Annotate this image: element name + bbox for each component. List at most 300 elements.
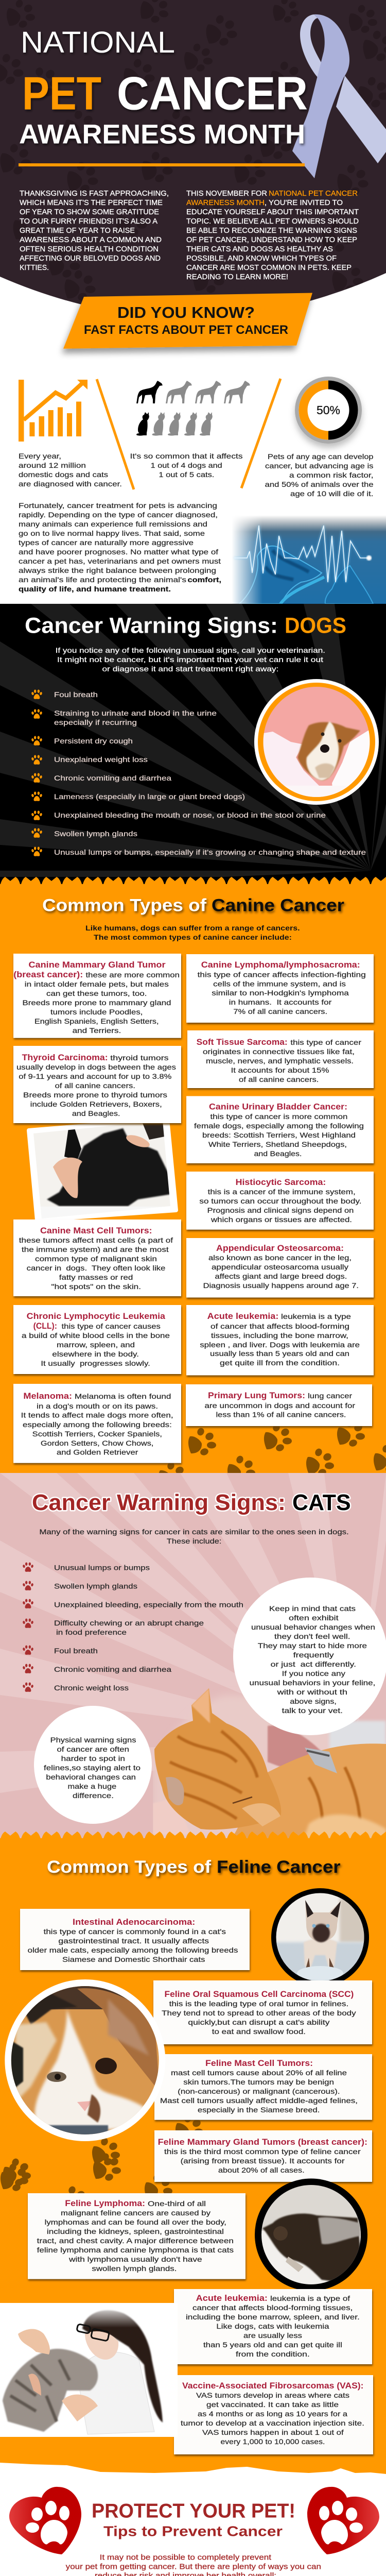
text block: feline mast details: (non-cancerous) or malignant (cancerous). — [178, 2087, 340, 2095]
card: vaccine associated fibrosarcomas — [174, 2375, 373, 2454]
heading: common types of feline cancer: Feline Cancer — [217, 1857, 341, 1877]
text block: mast cell details: these tumors affect mast cells (a part of — [19, 1236, 173, 1244]
text block: feline lymphoma details: One-third of all — [148, 2199, 206, 2208]
card: oral squamous cell carcinoma — [153, 1980, 372, 2044]
callout: behavior changes bubble: with or without th — [276, 1688, 347, 1696]
callout: physical signs bubble: felines,so staying alert to — [44, 1764, 141, 1772]
callout: behavior changes bubble: they don't feel well. — [274, 1632, 350, 1640]
text block: treatment paragraph: cancer a pet has, veterinarians and pet owners must — [19, 557, 221, 565]
text block: sarcoma details: It accounts for about 15% — [231, 1066, 329, 1074]
text block: feline lymphoma details: including the kidneys, spleen, gastrointestinal — [47, 2227, 224, 2235]
callout: behavior changes bubble: unusual behaviors in your feline, — [249, 1679, 375, 1687]
text block: intro right column: OF PET CANCER, UNDERSTAND HOW TO KEEP — [186, 235, 357, 244]
card: feline mammary gland tumors — [154, 2130, 372, 2182]
list: cat warning signs: in food preference — [56, 1628, 127, 1636]
text block: fact 3: a common risk factor, — [289, 471, 374, 479]
text block: feline lymphoma details: swollen lymph glands. — [92, 2264, 177, 2273]
text block: sarcoma details: this type of cancer — [290, 1038, 361, 1046]
text block: fact 3: age of 10 will die of it. — [290, 489, 374, 498]
title: PET — [22, 68, 101, 120]
callout: behavior changes bubble — [233, 1578, 386, 1735]
text block: osteosarcoma details — [203, 1253, 359, 1290]
callout: behavior changes bubble: They may start to hide more — [258, 1641, 367, 1650]
text block: lymphoma details: cells of the immune system, and is — [213, 980, 346, 988]
text block: mast cell details: the immune system) and are the most — [22, 1245, 169, 1253]
image: vet examining tabby cat — [0, 2303, 178, 2437]
callout: behavior changes bubble: often exhibit — [289, 1614, 339, 1622]
text block: fact 3: Pets of any age can develop — [268, 452, 374, 461]
text block: intro right column: POSSIBLE, AND KNOW WHICH TYPES OF — [186, 254, 337, 263]
text block: vas details: VAS tumors develop in areas where cats — [196, 2391, 349, 2399]
text block: intro left column: THANKSGIVING IS FAST APPROACHING, — [20, 189, 169, 198]
card: chronic lymphocytic leukemia: (CLL): — [33, 1321, 57, 1331]
text block: mast cell details: cancer in dogs. They often look like — [27, 1264, 166, 1272]
text block: feline mast details: skin tumors.The tumors may be benign — [183, 2078, 334, 2086]
image: sick beagle in bed — [254, 679, 379, 809]
list: dog warning signs: Unexplained weight loss — [54, 755, 148, 764]
text block: lung details — [205, 1392, 355, 1419]
card: feline mast cell tumors — [154, 2054, 372, 2120]
text block: intro right column: THEIR CATS AND DOGS AS HEALTHY AS — [186, 245, 333, 253]
text block: feline mammary details: about 20% of all cases. — [218, 2166, 305, 2174]
text block: mammary details: these are more common — [85, 971, 180, 979]
text block: scc details: They tend not to spread to other areas of the body — [162, 2009, 356, 2017]
text block: feline lymphoma details: malignant feline cancers are caused by — [61, 2209, 210, 2217]
text block: intro right column: NATIONAL PET CANCER — [269, 189, 358, 198]
text block: fact 3 — [265, 452, 374, 498]
panel: cat warning signs — [0, 1443, 386, 1839]
text block: canine intro: Like humans, dogs can suffer from a range of cancers. — [85, 924, 300, 932]
panel: canine cancer types — [0, 877, 386, 1490]
text block: treatment paragraph: rapidly. Depending on the type of cancer diagnosed, — [19, 511, 218, 519]
text block: intro left column: WHICH MEANS IT'S THE PERFECT TIME — [20, 198, 163, 207]
list: dog warning signs: Swollen lymph glands — [54, 829, 137, 838]
heading: common types of canine cancer — [42, 895, 344, 915]
card: feline mast cell tumors: Feline Mast Cell Tumors: — [205, 2058, 313, 2068]
card: canine mast cell tumors — [13, 1219, 181, 1296]
list: dog warning signs: Unexplained bleeding the mouth or nose, or blood in the stool or urine — [54, 811, 326, 819]
text block: mammary details: and Terriers. — [73, 1026, 121, 1035]
text block: protect intro — [66, 2553, 321, 2576]
card: appendicular osteosarcoma: Appendicular Osteosarcoma: — [216, 1243, 344, 1253]
text block: histiocytic details: this is a cancer of the immune system, — [208, 1188, 356, 1196]
heading: warning signs cats: Cancer Warning Signs: — [32, 1490, 286, 1515]
text block: mammary details: in intact older female pets, but males — [25, 980, 169, 988]
title: NATIONAL — [21, 26, 175, 59]
text block: thyroid details: thyroid tumors — [110, 1054, 169, 1062]
text block: intro: or diagnose it and start treatment right away: — [102, 665, 279, 673]
text block: mammary details: Breeds more prone to mammary gland — [23, 998, 171, 1007]
text block: lymphoma details: similar to non-Hodgkin's lymphoma — [212, 989, 349, 997]
card: melanoma — [13, 1384, 181, 1463]
heading: warning signs dogs: DOGS — [285, 613, 346, 638]
text block: protect intro: your pet from getting cancer. But there are plenty of ways you can — [66, 2563, 321, 2571]
banner: did you know — [63, 293, 312, 349]
text block: lymphoma details: in humans. It accounts for — [229, 998, 332, 1006]
icon: awareness ribbon — [292, 14, 386, 178]
list: cat warning signs: Chronic vomiting and diarrhea — [54, 1665, 171, 1673]
text block: feline lymphoma details — [37, 2199, 234, 2273]
list: dog warning signs: Chronic vomiting and diarrhea — [54, 774, 171, 782]
text block: thyroid details: of all canine cancers. — [55, 1081, 135, 1090]
callout: behavior changes bubble: frequently — [293, 1651, 334, 1659]
text block: melanoma details: in a dog's mouth or on its paws. — [37, 1402, 158, 1410]
text block: fact 2: It's so common that it affects — [130, 452, 243, 460]
text block: feline leukemia details: leukemia is a type of — [270, 2294, 350, 2302]
text block: acute leukemia details: usually less than 5 years old and can — [210, 1349, 349, 1358]
text block: intro right column: THIS NOVEMBER FOR — [186, 189, 267, 198]
chart: 50 percent donut — [295, 377, 362, 444]
callout: physical signs bubble: Physical warning signs — [50, 1736, 136, 1744]
card: acute leukemia — [186, 1305, 374, 1376]
image: orange tabby cat with stethoscope — [153, 1688, 386, 1839]
text block: fact 3: and 50% of animals over the — [265, 480, 374, 488]
heading: protect your pet — [92, 2500, 295, 2539]
text block: osteosarcoma details: appendicular osteosarcoma usually — [212, 1263, 348, 1271]
text block: cat intro: These include: — [167, 1537, 221, 1545]
text block: vas details: every 1,000 to 10,000 cases. — [220, 2437, 325, 2446]
text block: fact 1 — [19, 452, 122, 488]
text block: intro left column: AFFECTING OUR BELOVED DOGS AND — [20, 254, 161, 263]
text block: vas details: tumor to develop at a vaccination injection site. — [181, 2419, 364, 2427]
text block: melanoma details: and Golden Retriever — [57, 1448, 138, 1456]
icon: five cats one highlighted — [136, 412, 213, 436]
text block: intro left column: OF YEAR TO SHOW SOME GRATITUDE — [20, 208, 159, 216]
callout: physical signs bubble — [34, 1706, 152, 1824]
text block: vas details — [181, 2391, 364, 2446]
text block: feline leukemia details: from the condition. — [236, 2350, 310, 2358]
text block: cat intro — [39, 1528, 349, 1545]
heading: common types of canine cancer: Common Types of — [42, 895, 207, 915]
text block: fact 1: domestic dogs and cats — [19, 470, 108, 479]
card: urinary bladder cancer: Canine Urinary Bladder Cancer: — [209, 1102, 347, 1112]
text block: feline leukemia details: cancer that affects blood-forming tissues, — [192, 2303, 353, 2312]
list: cat warning signs — [54, 1563, 243, 1692]
card: canine lymphoma: Canine Lymphoma/lymphosacroma: — [201, 960, 360, 970]
panel: protect your pet — [0, 2487, 386, 2576]
text block: thyroid details: of 9-11 years and account for up to 3.8% — [19, 1072, 171, 1080]
card: thyroid carcinoma: Thyroid Carcinoma: — [22, 1053, 108, 1062]
text block: fact 3: cancer, but advancing age is — [265, 462, 374, 470]
text block: sarcoma details — [203, 1038, 361, 1083]
text block: intestinal details — [28, 1927, 238, 1963]
text block: feline mast details: mast cell tumors cause about 20% of all feline — [171, 2069, 347, 2077]
panel: dog warning signs — [0, 604, 386, 882]
callout: behavior changes bubble: unusual behavior changes when — [251, 1623, 375, 1631]
card: chronic lymphocytic leukemia — [13, 1305, 181, 1374]
title: CANCER — [117, 68, 308, 120]
card: feline acute leukemia: Acute leukemia: — [196, 2293, 268, 2303]
text block: fact 1: around 12 million — [19, 461, 86, 469]
text block: intro: It might not be cancer, but it's important that your vet can rule it out — [57, 655, 323, 664]
card: chronic lymphocytic leukemia: Chronic Lymphocytic Leukemia — [27, 1311, 166, 1321]
card: feline lymphoma: Feline Lymphoma: — [65, 2198, 145, 2208]
text block: fact 1: Every year, — [19, 452, 61, 460]
text block: histiocytic details: so tumors can occur throughout the body. — [199, 1197, 362, 1205]
card: thyroid carcinoma — [13, 1046, 181, 1123]
card: canine mammary gland tumor: (breast cancer): — [13, 970, 83, 979]
text block: osteosarcoma details: affects giant and large breed dogs. — [215, 1272, 347, 1280]
text block: fact 2 — [130, 452, 243, 479]
text block: leukemia details: a build of white blood cells in the bone — [22, 1331, 170, 1340]
callout: behavior changes bubble: If you notice any — [282, 1669, 345, 1677]
text block: fact 2: 1 out of 5 cats. — [159, 470, 214, 479]
heading: protect your pet: PROTECT YOUR PET! — [92, 2500, 295, 2522]
icon: four dogs one highlighted — [136, 381, 250, 403]
text block: canine intro — [85, 924, 300, 941]
card: oral squamous cell carcinoma: Feline Oral Squamous Cell Carcinoma (SCC) — [165, 1989, 354, 1999]
text block: lymphoma details: this type of cancer affects infection-fighting — [198, 970, 366, 978]
text block: intro right column: EDUCATE YOURSELF ABOUT THIS IMPORTANT — [186, 208, 359, 216]
list: dog warning signs: Unusual lumps or bumps, especially if it's growing or changing shape and texture — [54, 848, 366, 856]
text block: feline mast details — [160, 2069, 358, 2114]
text block: treatment paragraph — [19, 501, 221, 593]
text block: feline leukemia details — [186, 2294, 360, 2358]
text block: vas details: get vaccinated. It can take as little — [206, 2400, 339, 2409]
text block: melanoma details: Scottish Terriers, Cocker Spaniels, — [32, 1430, 162, 1438]
text block: protect intro: It may not be possible to completely prevent — [100, 2553, 271, 2562]
card: feline mammary gland tumors: Feline Mammary Gland Tumors (breast cancer): — [158, 2137, 367, 2147]
text block: mammary details: English Spaniels, English Setters, — [34, 1017, 159, 1025]
text block: thyroid details: usually develop in dogs between the ages — [16, 1063, 176, 1071]
image: siamese cat — [271, 1888, 371, 1987]
card: acute leukemia: Acute leukemia: — [207, 1311, 278, 1321]
text block: lymphoma details — [198, 970, 366, 1015]
icons: brown paw prints — [159, 1418, 386, 1490]
chart: 50 percent donut: 50% — [317, 403, 340, 417]
card: soft tissue sarcoma: Soft Tissue Sarcoma: — [197, 1037, 288, 1047]
text block: mast cell details — [19, 1236, 173, 1291]
text block: lung details: lung cancer — [308, 1392, 352, 1400]
callout: physical signs bubble: difference. — [73, 1791, 114, 1800]
card: histiocytic sarcoma: Histiocytic Sarcoma: — [236, 1177, 326, 1187]
text block: leukemia details: It usually progresses slowly. — [41, 1359, 150, 1367]
text block: treatment paragraph: and have poorer prognoses. No matter what type of — [19, 548, 218, 556]
text block: histiocytic details: Prognosis and clinical signs depend on — [207, 1206, 354, 1214]
list: cat warning signs: Difficulty chewing or an abrupt change — [54, 1619, 204, 1627]
callout: physical signs bubble: of cancer are often — [57, 1745, 129, 1753]
text block: bladder details — [194, 1112, 364, 1158]
text block: feline lymphoma details: feline lymphoma and canine lymphoma is that cats — [37, 2246, 234, 2254]
card: canine lymphoma — [186, 954, 374, 1023]
list: dog warning signs: Foul breath — [54, 690, 98, 699]
text block: treatment paragraph: types of cancer are naturally more aggressive — [19, 538, 194, 547]
text block: leukemia details: marrow, spleen, and — [57, 1341, 135, 1349]
text block: leukemia details: elsewhere in the body. — [52, 1350, 139, 1358]
text block: scc details — [162, 1999, 356, 2036]
text block: treatment paragraph: always strike the right balance between prolonging — [19, 566, 216, 574]
text block: treatment paragraph: comfort, — [187, 575, 221, 584]
icon: left heart paw — [9, 2487, 81, 2554]
text block: mast cell details: "hot spots" on the skin. — [51, 1282, 141, 1291]
text block: sarcoma details: muscle, nerves, and lymphatic vessels. — [206, 1057, 354, 1065]
text block: scc details: quickly,but can disrupt a cat's ability — [188, 2018, 329, 2026]
panel: feline cancer types — [0, 1832, 386, 2474]
callout: behavior changes bubble: Keep in mind that cats — [269, 1604, 356, 1613]
text block: osteosarcoma details: also known as bone cancer in the leg, — [208, 1253, 352, 1262]
text block: intestinal details: gastrointestinal tract. It usually affects — [58, 1937, 209, 1945]
text block: mast cell details: fatty masses or red — [59, 1273, 133, 1281]
text block: osteosarcoma details: Diagnosis usually happens around age 7. — [203, 1281, 359, 1290]
text block: sarcoma details: of all canine cancers. — [239, 1075, 319, 1083]
icon: right heart paw — [307, 2487, 379, 2554]
chart icon: rising bars — [19, 380, 87, 442]
text block: leukemia details: this type of cancer causes — [62, 1322, 161, 1330]
card: soft tissue sarcoma — [187, 1030, 374, 1088]
text block: mammary details — [23, 971, 180, 1035]
callout: physical signs bubble: make a huge — [68, 1782, 116, 1790]
text block: feline leukemia details: than 5 years old and can get quite ill — [203, 2341, 342, 2349]
card: urinary bladder cancer — [186, 1096, 374, 1163]
panel: hero header — [0, 0, 386, 318]
icons: orange paw bullets — [31, 689, 42, 856]
text block: thyroid details — [16, 1054, 176, 1117]
text block: intro left column: TO OUR FURRY FRIENDS! IT'S ALSO A — [20, 217, 157, 226]
text block: feline leukemia details: Like dogs, cats with leukemia — [216, 2322, 329, 2330]
image: dark cat with shaved patch — [255, 2178, 367, 2291]
text block: feline lymphoma details: lymphomas and can be found all over the body, — [45, 2218, 226, 2226]
text block: intro right column: CANCER ARE MOST COMMON IN PETS. KEEP — [186, 263, 352, 272]
text block: acute leukemia details: tissues, including the bone marrow, — [211, 1331, 348, 1340]
text block: melanoma details — [21, 1392, 173, 1456]
text block: histiocytic details: which organs or tissues are affected. — [210, 1215, 352, 1224]
list: cat warning signs: Unexplained bleeding, especially from the mouth — [54, 1600, 243, 1608]
text block: intro right column: BE ABLE TO RECOGNIZE THE WARNING SIGNS — [186, 226, 357, 235]
text block: acute leukemia details: get quite ill from the condition. — [220, 1359, 340, 1367]
text block: feline leukemia details: including the bone marrow, spleen, and liver. — [186, 2313, 360, 2321]
banner: did you know: DID YOU KNOW? — [117, 303, 255, 321]
text block: feline mammary details: this is the third most common type of feline cancer — [164, 2147, 361, 2156]
card: canine mast cell tumors: Canine Mast Cell Tumors: — [40, 1226, 152, 1235]
text block: feline mammary details — [164, 2147, 361, 2174]
text block: intro left column: AWARENESS ABOUT A COMMON AND — [20, 235, 162, 244]
text block: treatment paragraph: many animals can experience full remissions and — [19, 520, 207, 528]
text block: cat intro: Many of the warning signs for cancer in cats are similar to the ones seen in dogs. — [39, 1528, 349, 1536]
text block: lymphoma details: 7% of all canine cancers. — [233, 1007, 327, 1015]
callout: physical signs bubble: harder to spot in — [61, 1754, 125, 1762]
text block: intro left column: OFTEN SERIOUS HEALTH CONDITION — [20, 245, 159, 253]
card: feline acute leukemia — [174, 2289, 372, 2364]
text block: mammary details: tumors include Poodles, — [50, 1008, 143, 1016]
text block: feline mammary details: (arising from breast tissue). It accounts for — [181, 2157, 345, 2165]
card: primary lung tumors — [186, 1384, 372, 1426]
text block: feline mast details: Mast cell tumors usually affect middle-aged felines, — [160, 2096, 358, 2105]
text block: intro left column: KITTIES. — [20, 263, 49, 272]
text block: intestinal details: Siamese and Domestic Shorthair cats — [62, 1955, 205, 1963]
image: calico cat — [5, 1979, 165, 2141]
card: canine mammary gland tumor: Canine Mammary Gland Tumor — [29, 960, 166, 970]
text block: intestinal details: older male cats, especially among the following breeds — [28, 1946, 238, 1954]
text block: acute leukemia details — [200, 1312, 360, 1367]
text block: intro right column: READING TO LEARN MORE! — [186, 273, 288, 281]
heading: common types of feline cancer: Common Types of — [47, 1857, 212, 1877]
title: AWARENESS MONTH — [19, 120, 305, 149]
list: cat warning signs: Foul breath — [54, 1647, 98, 1655]
callout: behavior changes bubble: or just act differently. — [271, 1660, 356, 1668]
text block: fact 1: are diagnosed with cancer. — [19, 480, 122, 488]
callout: behavior changes bubble: talk to your vet. — [282, 1706, 343, 1715]
text block: feline leukemia details: are usually less — [243, 2331, 302, 2340]
text block: feline mast details: especially in the Siamese breed. — [198, 2106, 320, 2114]
text block: bladder details: and Beagles. — [254, 1149, 302, 1158]
card: canine mammary gland tumor — [13, 954, 181, 1038]
text block: intro right column — [186, 189, 359, 281]
text block: intro: If you notice any of the following unusual signs, call your veterinarian. — [56, 646, 325, 654]
text block: treatment paragraph: go on to live normal happy lives. That said, some — [19, 529, 205, 537]
card: primary lung tumors: Primary Lung Tumors: — [208, 1391, 305, 1400]
card: intestinal adenocarcinoma: Intestinal Adenocarcinoma: — [73, 1917, 195, 1927]
text block: melanoma details: It tends to affect male dogs more often, — [21, 1411, 173, 1419]
text block: thyroid details: include Golden Retrievers, Boxers, — [30, 1100, 162, 1108]
heading: common types of canine cancer: Canine Cancer — [212, 895, 344, 915]
text block: leukemia details — [22, 1322, 170, 1367]
text block: histiocytic details — [199, 1188, 362, 1224]
text block: scc details: this is the leading type of oral tumor in felines. — [169, 1999, 348, 2008]
list: cat warning signs: Chronic weight loss — [54, 1684, 129, 1692]
card: feline lymphoma — [28, 2193, 245, 2279]
list: cat warning signs: Swollen lymph glands — [54, 1582, 137, 1590]
card: histiocytic sarcoma — [186, 1172, 374, 1230]
icons: red paw bullets — [23, 1562, 33, 1692]
text block: bladder details: female dogs, especially among the following — [194, 1122, 364, 1130]
heading: warning signs dogs: Cancer Warning Signs: — [25, 613, 278, 638]
text block: feline lymphoma details: with lymphoma usually don't have — [68, 2255, 202, 2263]
heading: common types of feline cancer — [47, 1857, 341, 1877]
text block: intro left column: GREAT TIME OF YEAR TO RAISE — [20, 226, 135, 235]
text block: treatment paragraph: an animal's life and protecting the animal's — [19, 575, 186, 584]
list: dog warning signs: Persistent dry cough — [54, 737, 133, 745]
text block: treatment paragraph: quality of life, and humane treatment. — [19, 585, 171, 593]
image: black labrador with vet — [29, 1118, 176, 1222]
text block: intro right column: AWARENESS MONTH — [186, 198, 265, 207]
text block: acute leukemia details: spleen , and liver. Dogs with leukemia are — [200, 1341, 360, 1349]
text block: melanoma details: especially among the following breeds: — [23, 1420, 172, 1429]
list: dog warning signs: especially if recurring — [54, 718, 137, 726]
text block: mammary details: can get these tumors, too. — [46, 989, 147, 997]
card: melanoma: Melanoma: — [23, 1391, 72, 1401]
text block: treatment paragraph: Fortunately, cancer treatment for pets is advancing — [19, 501, 217, 510]
list: cat warning signs: Unusual lumps or bumps — [54, 1563, 150, 1571]
text block: melanoma details: Gordon Setters, Chow Chows, — [41, 1439, 153, 1447]
callout: physical signs bubble: behavioral changes can — [46, 1773, 136, 1781]
icons: brown paw prints — [1, 2113, 203, 2215]
text block: intro left column — [20, 189, 169, 272]
text block: fact 2: 1 out of 4 dogs and — [151, 461, 222, 469]
text block: intro — [56, 646, 325, 673]
text block: intestinal details: this type of cancer is commonly found in a cat's — [44, 1927, 226, 1936]
text block: mast cell details: common type of malignant skin — [35, 1255, 157, 1263]
text block: thyroid details: Breeds more prone to thyroid tumors — [23, 1091, 167, 1099]
text block: bladder details: this type of cancer is more common — [210, 1112, 347, 1121]
heading: protect your pet: Tips to Prevent Cancer — [103, 2523, 283, 2539]
banner: did you know: FAST FACTS ABOUT PET CANCER — [84, 323, 288, 337]
text block: intro right column: , YOU'RE INVITED TO — [265, 198, 343, 207]
callout: behavior changes bubble: above signs, — [290, 1697, 337, 1705]
text block: lung details: are uncommon in dogs and account for — [205, 1401, 355, 1410]
text block: sarcoma details: originates in connective tissues like fat, — [203, 1047, 355, 1056]
text block: vas details: VAS tumors happen in about 1 out of — [202, 2428, 344, 2436]
text block: canine intro: The most common types of canine cancer include: — [94, 933, 292, 941]
text block: intro right column: TOPIC. WE BELIEVE ALL PET OWNERS SHOULD — [186, 217, 359, 226]
text block: scc details: to eat and swallow food. — [212, 2027, 306, 2036]
card: vaccine associated fibrosarcomas: Vaccine-Associated Fibrosarcomas (VAS): — [182, 2381, 363, 2391]
text block: bladder details: breeds: Scottish Terriers, West Highland — [202, 1131, 356, 1139]
image: heartbeat with dog and cat — [232, 515, 386, 604]
heading: warning signs cats: CATS — [292, 1490, 351, 1515]
card: intestinal adenocarcinoma — [20, 1909, 250, 1970]
text block: acute leukemia details: leukemia is a type — [281, 1312, 351, 1320]
list: dog warning signs: Straining to urinate and blood in the urine — [54, 709, 217, 717]
